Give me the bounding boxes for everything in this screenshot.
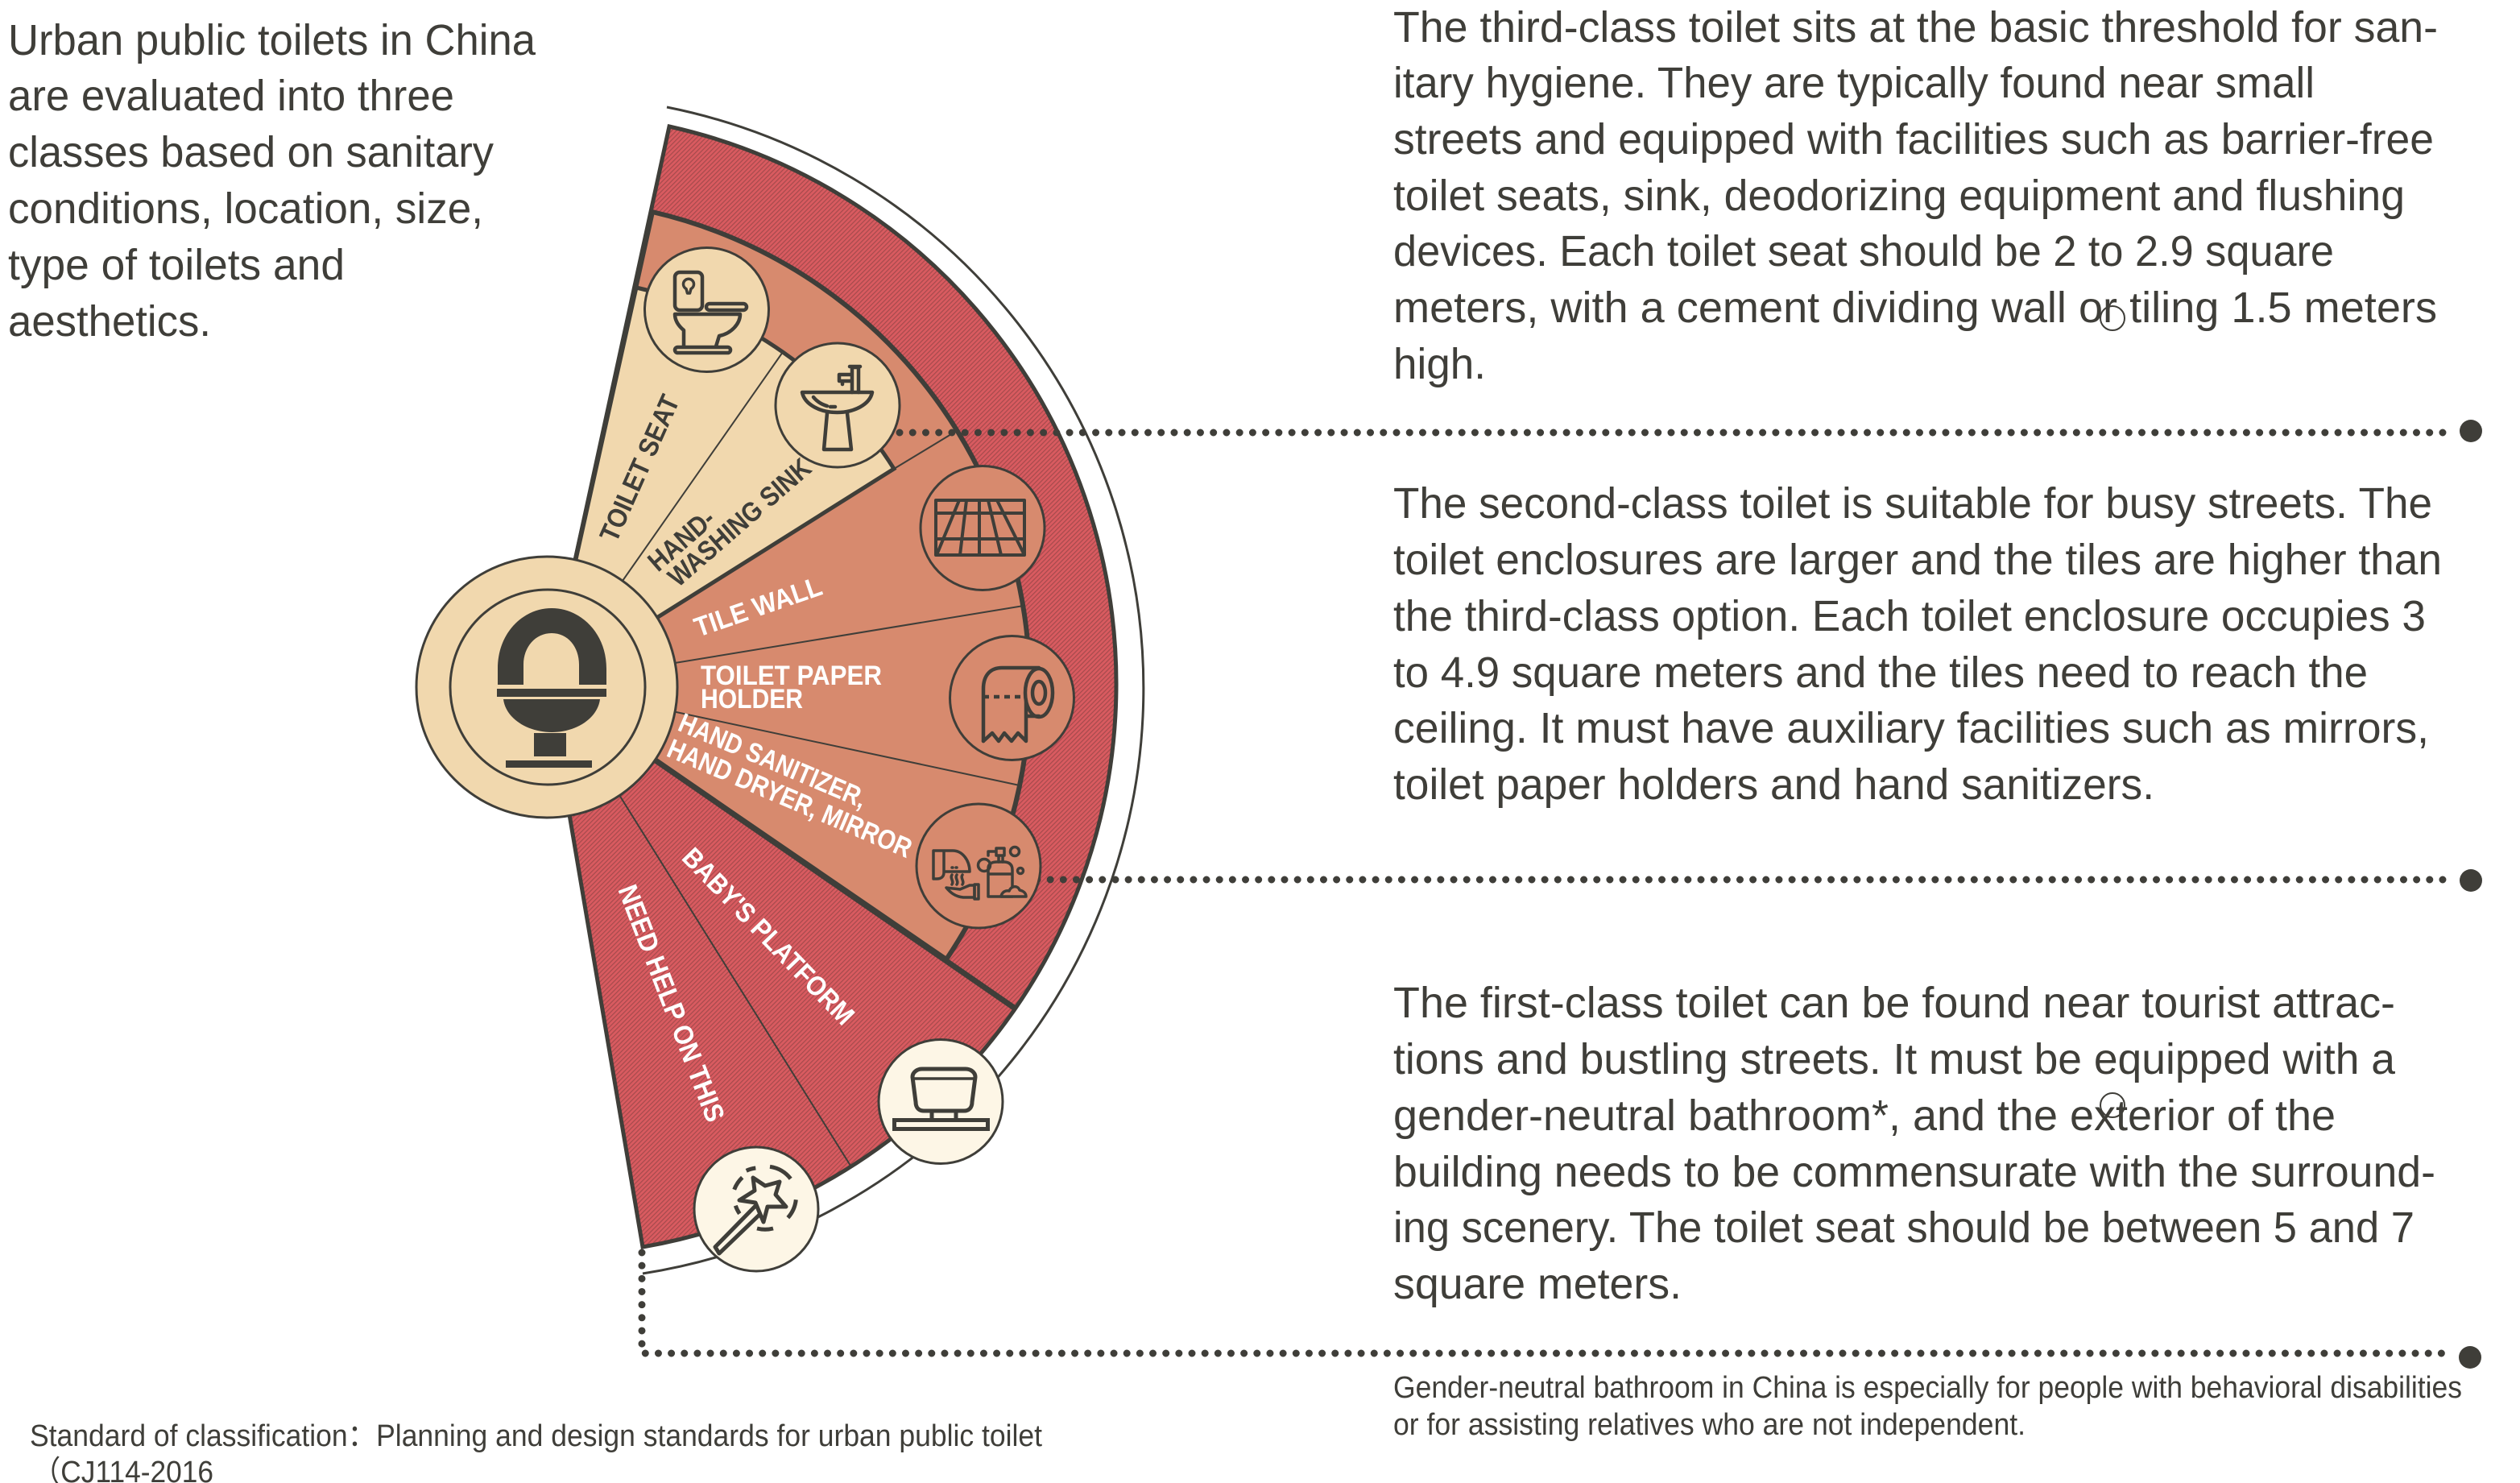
intro text: aesthetics. <box>8 297 211 346</box>
text: third-class toilet: itary hygiene. They are typically found near small <box>1393 59 2315 107</box>
text: first-class toilet: tions and bustling streets. It must be equipped with a <box>1393 1035 2396 1083</box>
text: third-class toilet: The third-class toilet sits at the basic threshold for san- <box>1393 3 2438 52</box>
intro text: type of toilets and <box>8 241 345 289</box>
intro text: are evaluated into three <box>8 72 454 120</box>
label: tile wall: TILE WALL <box>690 571 826 644</box>
text: first-class toilet: square meters. <box>1393 1260 1682 1308</box>
class boundary line <box>656 760 1016 1009</box>
text: second-class toilet: ceiling. It must have auxiliary facilities such as mirrors, <box>1393 704 2429 752</box>
text: third-class toilet <box>1393 3 2438 388</box>
icon: baby's platform <box>879 1039 1003 1163</box>
text: second-class toilet: to 4.9 square meters and the tiles need to reach the <box>1393 648 2368 697</box>
label: hand-washing sink: WASHING SINK <box>662 452 817 593</box>
label: toilet seat: TOILET SEAT <box>594 390 686 546</box>
text: third-class toilet: meters, with a cement dividing wall or tiling 1.5 meters <box>1393 284 2437 332</box>
intro text <box>8 16 536 346</box>
cursor marks <box>2100 306 2125 1117</box>
thin dividers <box>619 352 1024 1166</box>
icon: hand dryer and sanitizer <box>917 804 1041 928</box>
intro text: Urban public toilets in China <box>8 16 536 64</box>
text: second-class toilet: toilet enclosures are larger and the tiles are higher than <box>1393 536 2442 584</box>
label: hand sanitizer, hand dryer, mirror: HAND DRYER, MIRROR <box>663 733 917 864</box>
label: hand sanitizer, hand dryer, mirror: HAND SANITIZER, <box>674 707 871 814</box>
text: third-class toilet: streets and equipped with facilities such as barrier-free <box>1393 115 2434 164</box>
footnote: gender-neutral bathroom: Gender-neutral bathroom in China is especially for people with behavioral disabilities <box>1393 1371 2462 1405</box>
footnote: gender-neutral bathroom: or for assisting relatives who are not independent. <box>1393 1408 2026 1442</box>
label: hand-washing sink: HAND- <box>642 503 721 578</box>
text: second-class toilet: the third-class option. Each toilet enclosure occupies 3 <box>1393 592 2426 640</box>
icon: tile wall <box>921 466 1045 590</box>
icon: toilet paper <box>950 636 1074 760</box>
sector: third class beige <box>548 288 894 686</box>
source note <box>30 1419 1042 1483</box>
sector: first class red <box>548 126 1116 1247</box>
text: third-class toilet: high. <box>1393 340 1486 388</box>
label: baby's platform: BABY'S PLATFORM <box>676 842 860 1031</box>
text: first-class toilet: ing scenery. The toilet seat should be between 5 and 7 <box>1393 1203 2414 1252</box>
label: toilet paper holder: HOLDER <box>701 684 803 715</box>
text: second-class toilet <box>1393 479 2442 809</box>
text: second-class toilet: The second-class toilet is suitable for busy streets. The <box>1393 479 2432 528</box>
text: third-class toilet: toilet seats, sink, deodorizing equipment and flushing <box>1393 172 2405 220</box>
icon: sink <box>776 343 900 467</box>
label: need help on this: NEED HELP ON THIS <box>612 880 730 1126</box>
sector: second class orange <box>548 212 1030 959</box>
fan diagram <box>416 126 2482 1369</box>
text: first-class toilet <box>1393 979 2435 1308</box>
dotted leader lines <box>642 433 2443 1353</box>
end dots <box>2459 420 2482 1369</box>
icon: magic wand <box>694 1147 818 1271</box>
intro text: conditions, location, size, <box>8 184 483 233</box>
footnote: gender-neutral bathroom <box>1393 1371 2462 1442</box>
intro text: classes based on sanitary <box>8 128 494 176</box>
text: first-class toilet: building needs to be commensurate with the surround- <box>1393 1148 2435 1196</box>
text: third-class toilet: devices. Each toilet seat should be 2 to 2.9 square <box>1393 227 2334 275</box>
outer thin arc <box>643 107 1144 1274</box>
text: first-class toilet: gender-neutral bathroom*, and the exterior of the <box>1393 1092 2336 1140</box>
label: toilet paper holder: TOILET PAPER <box>701 661 882 691</box>
source note: Standard of classification：Planning and design standards for urban public toilet <box>30 1419 1042 1453</box>
text: first-class toilet: The first-class toilet can be found near tourist attrac- <box>1393 979 2395 1027</box>
hub icon: toilet <box>416 557 677 818</box>
label: toilet paper holder <box>701 661 882 715</box>
text: second-class toilet: toilet paper holders and hand sanitizers. <box>1393 760 2154 809</box>
icon: toilet seat <box>644 248 768 372</box>
